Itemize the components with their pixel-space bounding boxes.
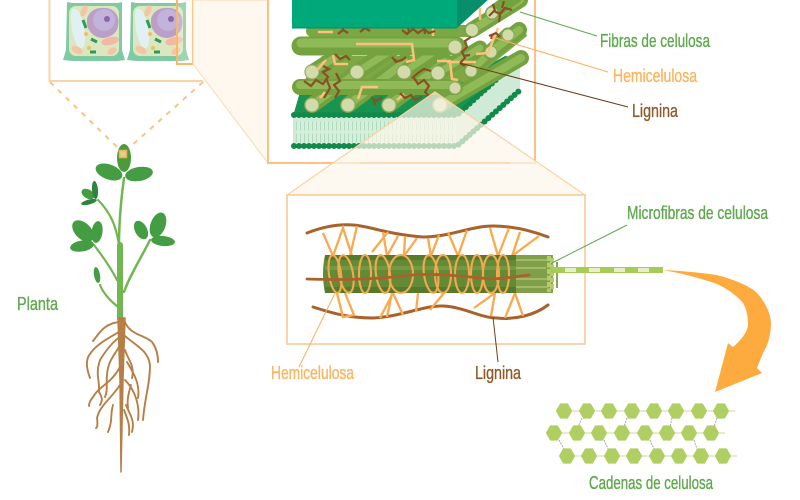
membrane (293, 56, 520, 146)
hexagon row 3 (560, 449, 730, 463)
label: Fibras de celulosa: Fibras de celulosa (600, 31, 711, 51)
microfibril cylinder (323, 255, 557, 293)
icon: plant cell 2 (127, 2, 189, 61)
lignin clusters (304, 1, 512, 105)
arrow: curved orange (663, 270, 771, 392)
hexagon row 1 (556, 404, 728, 418)
hexagon row 2 (546, 426, 718, 440)
cellulose fibers (300, 0, 527, 105)
plant leaves (68, 144, 175, 283)
cellulose block (cut away) (292, 0, 490, 28)
hemicellulose loops over cylinder (326, 254, 509, 294)
zoom projection: cell wall to large panel (193, 0, 268, 163)
hemicellulose links (323, 226, 539, 318)
label: Hemicelulosa bottom: Hemicelulosa (271, 363, 355, 383)
plant roots (87, 318, 158, 472)
label: Hemicelulosa top: Hemicelulosa (613, 66, 698, 86)
bud highlight (120, 150, 126, 158)
icon: plant (68, 144, 175, 472)
lignin strands (307, 225, 548, 318)
panel: microfibril detail (287, 195, 585, 344)
chain linkers (554, 411, 737, 456)
hemicellulose strands (317, 8, 498, 100)
leader lines (299, 12, 628, 367)
chains: cellulose hexagons (546, 404, 737, 463)
plant stems (94, 178, 150, 318)
label: Lignina bottom: Lignina (475, 363, 522, 383)
central lignin strand (307, 274, 529, 280)
label: Cadenas de celulosa: Cadenas de celulosa (589, 473, 714, 493)
panel: plant cells (50, 0, 203, 147)
icon: plant cell 1 (63, 2, 125, 61)
microfibril strand (550, 267, 663, 273)
zoom projection: lower panel (287, 92, 585, 195)
label: Lignina top: Lignina (632, 101, 679, 121)
fiber end caps (305, 7, 514, 112)
label: Planta: Planta (17, 294, 59, 314)
panel: cell wall structure (268, 0, 535, 163)
